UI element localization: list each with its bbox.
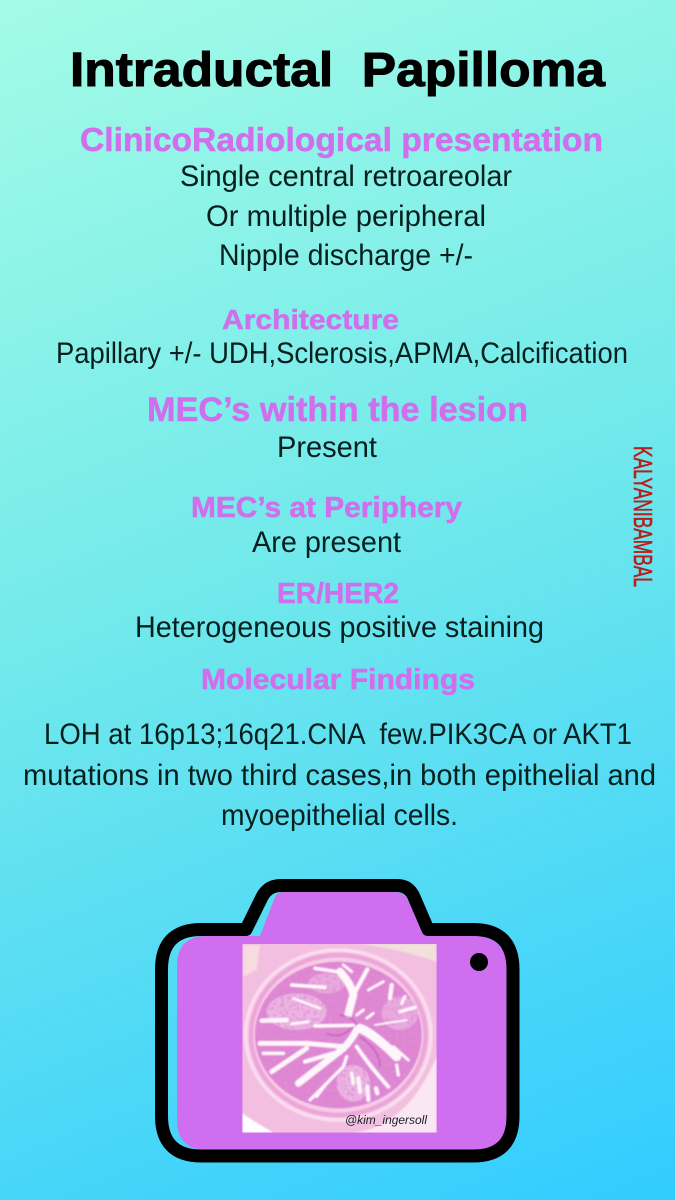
text: presentation lines: Or multiple peripheral bbox=[206, 200, 486, 233]
camera black outline bbox=[162, 886, 513, 1156]
text: architecture detail: Papillary +/- UDH,Sclerosis,APMA,Calcification bbox=[56, 337, 628, 370]
histology photo bbox=[242, 944, 437, 1133]
camera button bbox=[470, 953, 488, 971]
text: molecular findings paragraph bbox=[23, 718, 656, 832]
title: Intraductal Papilloma bbox=[70, 44, 605, 97]
text: molecular findings paragraph: mutations in two third cases,in both epithelial and bbox=[23, 759, 656, 792]
text: presentation lines bbox=[180, 160, 512, 272]
tissue grain bbox=[255, 962, 422, 1108]
credit: vertical author name: KALYANIBAMBAL bbox=[628, 446, 658, 587]
icon: camera with histology photo bbox=[162, 886, 513, 1156]
camera purple fill bbox=[177, 892, 507, 1150]
text: molecular findings paragraph: myoepithelial cells. bbox=[221, 799, 458, 832]
heading: ER/HER2: ER/HER2 bbox=[277, 578, 399, 610]
heading: Molecular Findings: Molecular Findings bbox=[201, 664, 475, 696]
text: are present: Are present bbox=[252, 526, 402, 559]
text: molecular findings paragraph: LOH at 16p13;16q21.CNA few.PIK3CA or AKT1 bbox=[44, 718, 632, 751]
heading: ClinicoRadiological presentation: ClinicoRadiological presentation bbox=[80, 121, 603, 158]
heading: MEC's at Periphery: MEC’s at Periphery bbox=[191, 492, 462, 524]
text: present: Present bbox=[277, 431, 378, 464]
text: presentation lines: Nipple discharge +/- bbox=[219, 239, 473, 272]
heading: Architecture: Architecture bbox=[222, 304, 399, 335]
text: presentation lines: Single central retroareolar bbox=[180, 160, 512, 193]
heading: MEC's within the lesion: MEC’s within the lesion bbox=[147, 391, 528, 429]
text: staining: Heterogeneous positive staining bbox=[135, 611, 544, 644]
photo credit: @kim_ingersoll bbox=[345, 1113, 427, 1127]
